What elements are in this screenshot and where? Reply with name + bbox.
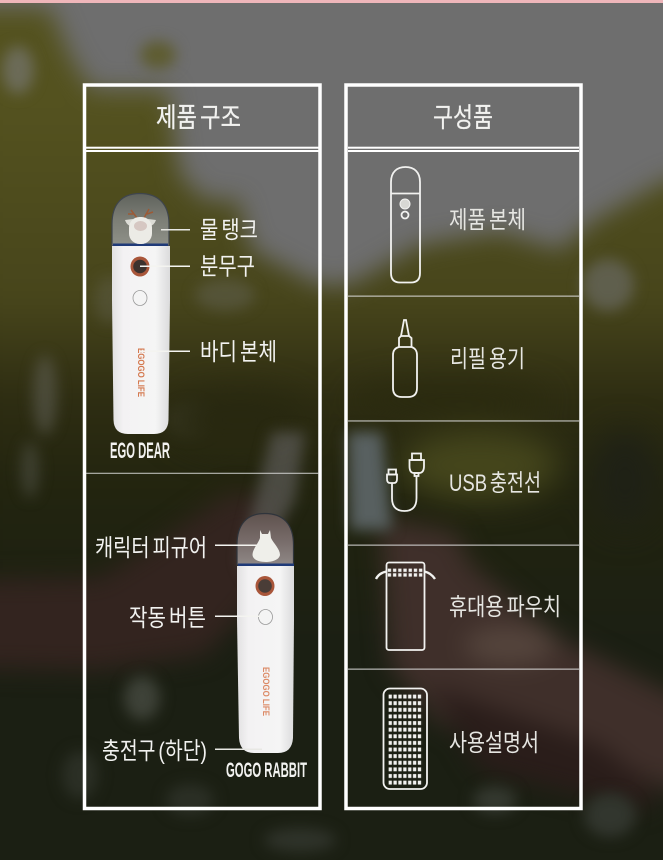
label: 바디 본체 — [140, 339, 277, 366]
icon: pouch — [376, 562, 435, 650]
product: GOGO RABBIT device: EGOGO LIFE — [260, 667, 271, 716]
item: 리필 용기 — [393, 320, 525, 397]
heading: 구성품: 구성품 — [433, 103, 493, 133]
icon: device outline — [391, 167, 420, 282]
label: 캐릭터 피규어: 캐릭터 피규어 — [95, 535, 207, 562]
icon: deer figure — [125, 209, 156, 244]
item: 리필 용기: 리필 용기 — [450, 346, 525, 373]
top pink strip — [0, 0, 663, 3]
icon: USB cable — [387, 454, 424, 511]
label: 작동 버튼: 작동 버튼 — [129, 605, 206, 632]
label: 바디 본체: 바디 본체 — [200, 339, 277, 366]
label: 분무구: 분무구 — [200, 254, 255, 280]
label: 분무구 — [140, 254, 255, 280]
item: USB 충전선 — [387, 454, 541, 511]
label: 물 탱크 — [161, 217, 258, 244]
item: 사용설명서: 사용설명서 — [449, 730, 539, 757]
icon: rabbit figure — [252, 530, 280, 562]
product: EGO DEAR device — [112, 194, 170, 434]
item: 사용설명서 — [384, 688, 539, 789]
item: USB 충전선: USB 충전선 — [449, 470, 541, 497]
label: 물 탱크: 물 탱크 — [200, 217, 258, 244]
icon: refill bottle — [393, 320, 417, 397]
item: 제품 본체: 제품 본체 — [449, 207, 526, 234]
item: 휴대용 파우치 — [376, 562, 561, 650]
panel: 제품 구조 — [84, 85, 320, 808]
heading: 제품 구조: 제품 구조 — [156, 103, 241, 133]
item: 제품 본체 — [391, 167, 526, 282]
panel: 구성품 — [346, 85, 581, 808]
model name: EGO DEAR: EGO DEAR — [110, 438, 170, 463]
icon: manual — [384, 688, 427, 789]
label: 충전구 (하단): 충전구 (하단) — [102, 738, 207, 765]
label: 작동 버튼 — [129, 605, 261, 632]
model name: GOGO RABBIT: GOGO RABBIT — [226, 759, 307, 782]
item: 휴대용 파우치: 휴대용 파우치 — [449, 594, 561, 621]
product: EGO DEAR device: EGOGO LIFE — [135, 348, 146, 397]
product: GOGO RABBIT device — [237, 514, 294, 753]
